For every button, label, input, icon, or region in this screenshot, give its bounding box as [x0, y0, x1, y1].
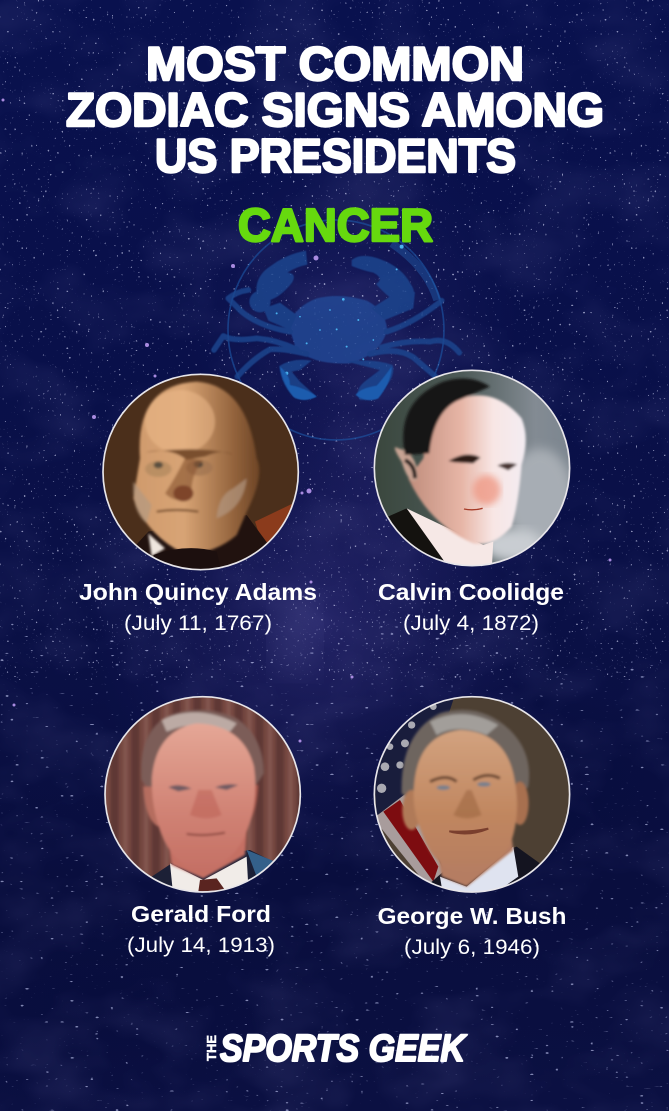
label: Gerald Ford [127, 901, 275, 957]
crab left claw [256, 251, 307, 301]
label: John Quincy Adams: John Quincy Adams [79, 579, 317, 605]
label: Calvin Coolidge: (July 4, 1872) [403, 612, 539, 635]
label: Gerald Ford: Gerald Ford [131, 901, 271, 927]
title [66, 37, 604, 182]
label: Gerald Ford: (July 14, 1913) [127, 934, 275, 957]
title: ZODIAC SIGNS AMONG [66, 83, 604, 136]
logo: The Sports Geek: SPORTS GEEK [220, 1028, 467, 1070]
title: MOST COMMON [146, 37, 524, 90]
label: Calvin Coolidge [378, 579, 564, 635]
portrait: George W. Bush [370, 695, 577, 897]
heading: cancer: CANCER [238, 199, 433, 251]
portrait: John Quincy Adams [100, 372, 303, 578]
label: George W. Bush: George W. Bush [378, 903, 566, 929]
logo: The Sports Geek: THE [204, 1035, 219, 1061]
label: John Quincy Adams: (July 11, 1767) [124, 612, 272, 635]
portrait: Calvin Coolidge [370, 368, 577, 575]
label: John Quincy Adams [79, 579, 317, 635]
crab right claw [352, 256, 414, 309]
label: Calvin Coolidge: Calvin Coolidge [378, 579, 564, 605]
portrait: Gerald Ford [103, 695, 303, 897]
crab lower pincers [280, 367, 392, 400]
label: George W. Bush [378, 903, 566, 959]
crab body [288, 296, 387, 364]
label: George W. Bush: (July 6, 1946) [404, 936, 540, 959]
icon: cancer crab zodiac emblem [214, 220, 459, 440]
title: US PRESIDENTS [155, 129, 516, 182]
